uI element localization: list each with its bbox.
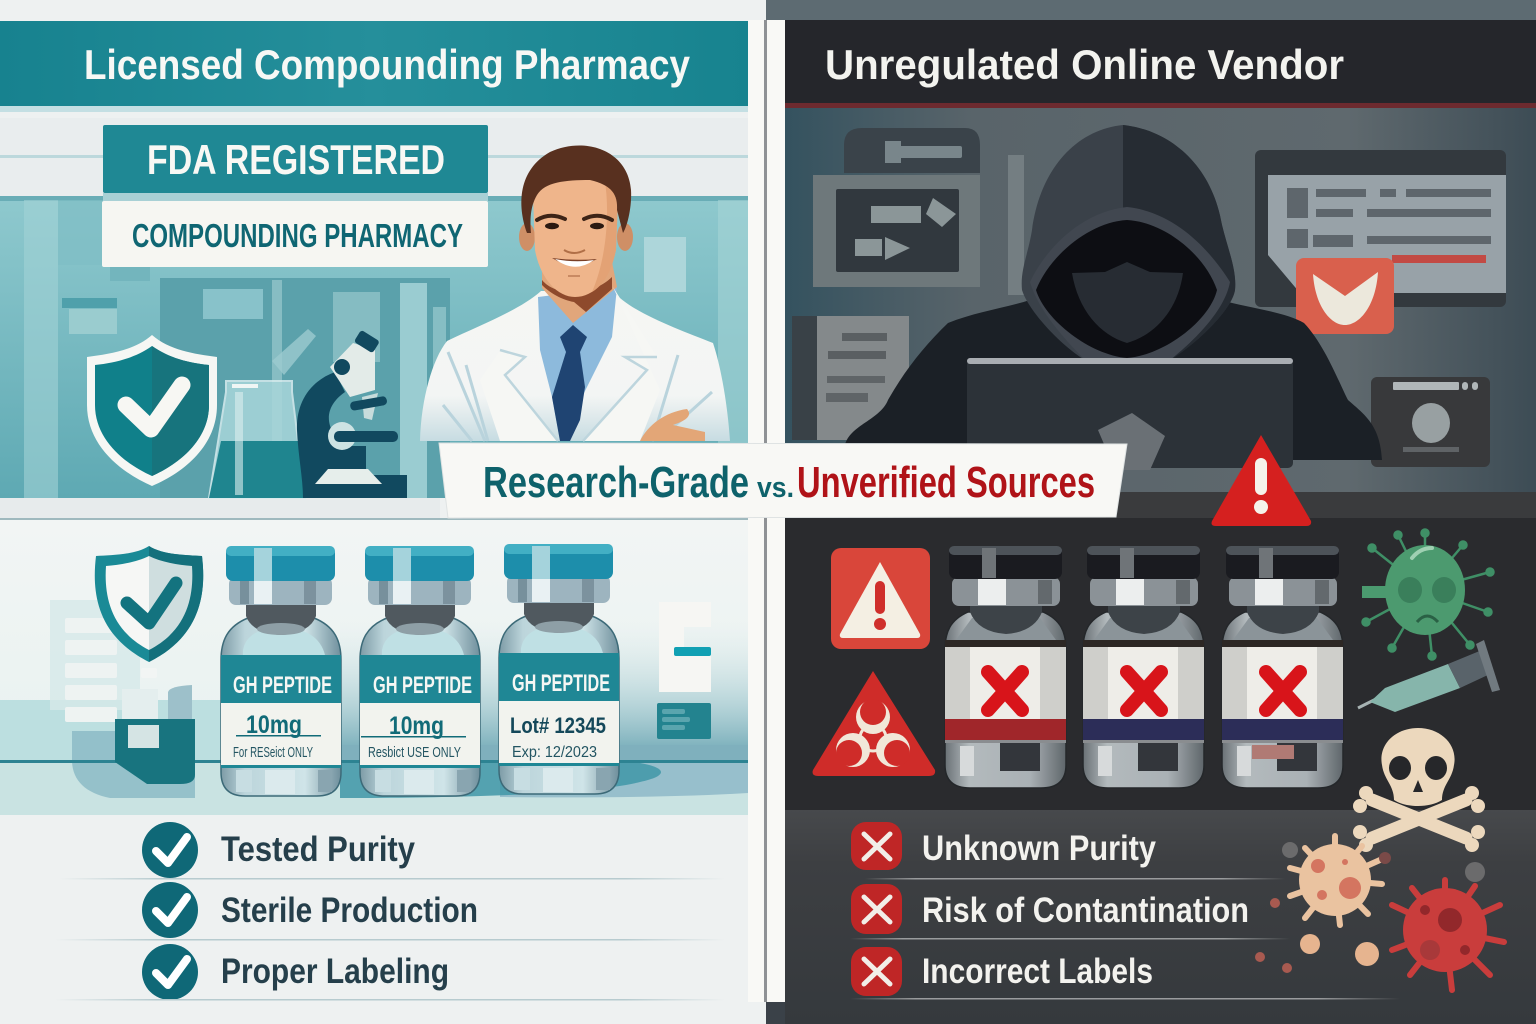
icon: folder with arrows <box>813 128 980 287</box>
figure: smiling pharmacist <box>420 146 730 441</box>
title banner: vs. <box>757 472 794 504</box>
header: licensed compounding pharmacy: Licensed Compounding Pharmacy <box>84 41 691 88</box>
title banner: Unverified Sources <box>797 458 1095 507</box>
panel floor <box>785 810 1536 1024</box>
vial: 10mg restricted use: GH PEPTIDE <box>373 672 472 699</box>
vial: 10mg restricted use: Resbict USE ONLY <box>368 744 461 761</box>
icon: red alert triangle <box>1212 435 1311 526</box>
icon: green virus <box>1362 530 1494 660</box>
icon: large shield with check <box>87 335 217 486</box>
list: unknown purity <box>851 822 1285 880</box>
title banner <box>439 443 1127 518</box>
vial: 10mg restricted use: 10mg <box>389 712 444 740</box>
icon: beaker <box>209 329 316 498</box>
list: incorrect labels <box>850 947 1400 1000</box>
vial: lot number and expiry: Exp: 12/2023 <box>512 744 597 761</box>
title banner: Research-Grade <box>483 458 749 507</box>
decorative light post <box>1008 155 1024 295</box>
sign: FDA registered compounding pharmacy: FDA REGISTERED <box>147 136 445 183</box>
list: proper labeling: Proper Labeling <box>221 952 449 991</box>
list: tested purity: Tested Purity <box>221 830 415 869</box>
list: proper labeling <box>55 944 725 1000</box>
vial: 10mg research only: 10mg <box>246 711 302 739</box>
center divider <box>748 20 785 1002</box>
list: unknown purity: Unknown Purity <box>922 829 1156 868</box>
lower dark shelf <box>785 492 1536 810</box>
icon: biohazard triangle <box>813 671 935 776</box>
scene: lower shelf <box>0 520 748 815</box>
figure: hooded hacker with laptop <box>845 125 1382 470</box>
icon: right side box and card <box>657 602 711 739</box>
list: tested purity <box>60 822 725 880</box>
header: unregulated online vendor <box>785 20 1536 108</box>
list: sterile production: Sterile Production <box>221 891 478 930</box>
panel: unregulated vendor side <box>766 0 1536 1024</box>
icon: warning tile <box>831 548 930 649</box>
list: sterile production <box>55 882 725 940</box>
sign: FDA registered compounding pharmacy <box>102 125 488 267</box>
icon: syringe <box>1358 640 1500 712</box>
icon: document <box>792 316 909 440</box>
vial: lot number and expiry: GH PEPTIDE <box>512 670 610 697</box>
vial: lot number and expiry <box>499 544 619 794</box>
icon: small shield with check <box>95 546 203 662</box>
vial: lot number and expiry: Lot# 12345 <box>510 713 606 738</box>
vial: navy band with x, right <box>1222 546 1343 788</box>
icon: browser window <box>1255 150 1506 307</box>
vial: 10mg research only: For RESeict ONLY <box>233 744 313 761</box>
vial: 10mg research only: GH PEPTIDE <box>233 672 332 699</box>
list: risk of contamination: Risk of Contantination <box>922 891 1249 930</box>
icon: camera panel <box>1371 377 1490 467</box>
icon: skull and crossbones <box>1353 728 1485 852</box>
vial: 10mg research only <box>221 546 341 796</box>
vial: 10mg restricted use <box>360 546 480 796</box>
icon: microscope <box>297 330 407 498</box>
scene: pharmacy interior <box>0 118 748 520</box>
vial: navy band with x <box>1083 546 1204 788</box>
icon: red check tile <box>1296 258 1394 334</box>
panel: licensed pharmacy side <box>0 0 766 1024</box>
icon: supply bottle <box>115 668 195 784</box>
header: unregulated online vendor: Unregulated Online Vendor <box>825 41 1344 88</box>
sign: FDA registered compounding pharmacy: COMPOUNDING PHARMACY <box>132 217 463 254</box>
scene: dark room wall <box>785 108 1536 492</box>
icon: red virus <box>1392 880 1504 990</box>
list: incorrect labels: Incorrect Labels <box>922 952 1153 991</box>
list: risk of contamination <box>850 884 1290 940</box>
vial: red band with x <box>945 546 1066 788</box>
header: licensed compounding pharmacy <box>0 21 748 112</box>
icon: peach bacteria <box>1255 836 1485 973</box>
